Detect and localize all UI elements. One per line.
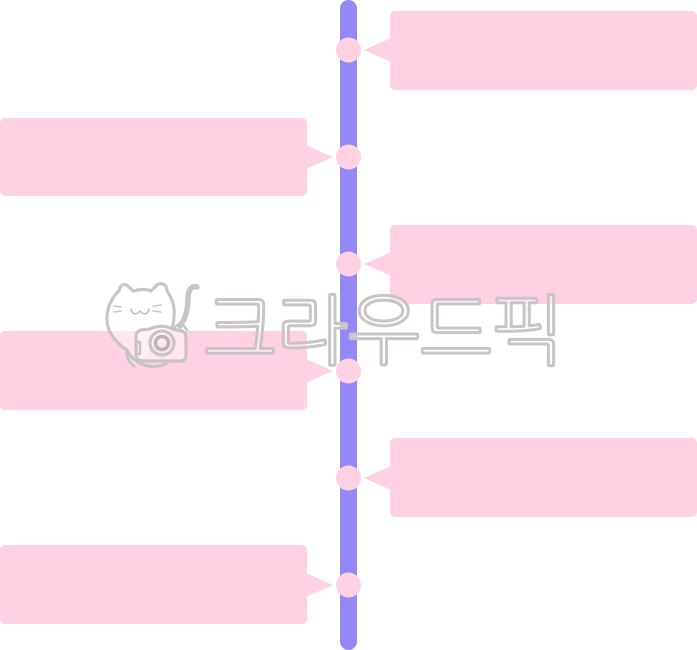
timeline node 6 bbox=[336, 572, 361, 598]
callout 3 (right) bbox=[364, 225, 697, 304]
timeline node 5 bbox=[336, 466, 361, 490]
timeline node 4 bbox=[336, 358, 361, 384]
watermark wordmark: 크라우드픽 bbox=[204, 289, 564, 375]
callout 5 (right) bbox=[364, 438, 697, 517]
callout 2 (left) bbox=[0, 118, 333, 196]
icon: cat with camera watermark bbox=[107, 284, 197, 366]
timeline node 1 bbox=[336, 38, 361, 62]
callout 4 (left) bbox=[0, 331, 333, 410]
callout 1 (right) bbox=[364, 11, 697, 90]
timeline node 3 bbox=[336, 252, 361, 276]
vertical timeline rail bbox=[340, 0, 357, 650]
timeline node 2 bbox=[336, 144, 361, 170]
callout 6 (left) bbox=[0, 545, 333, 624]
